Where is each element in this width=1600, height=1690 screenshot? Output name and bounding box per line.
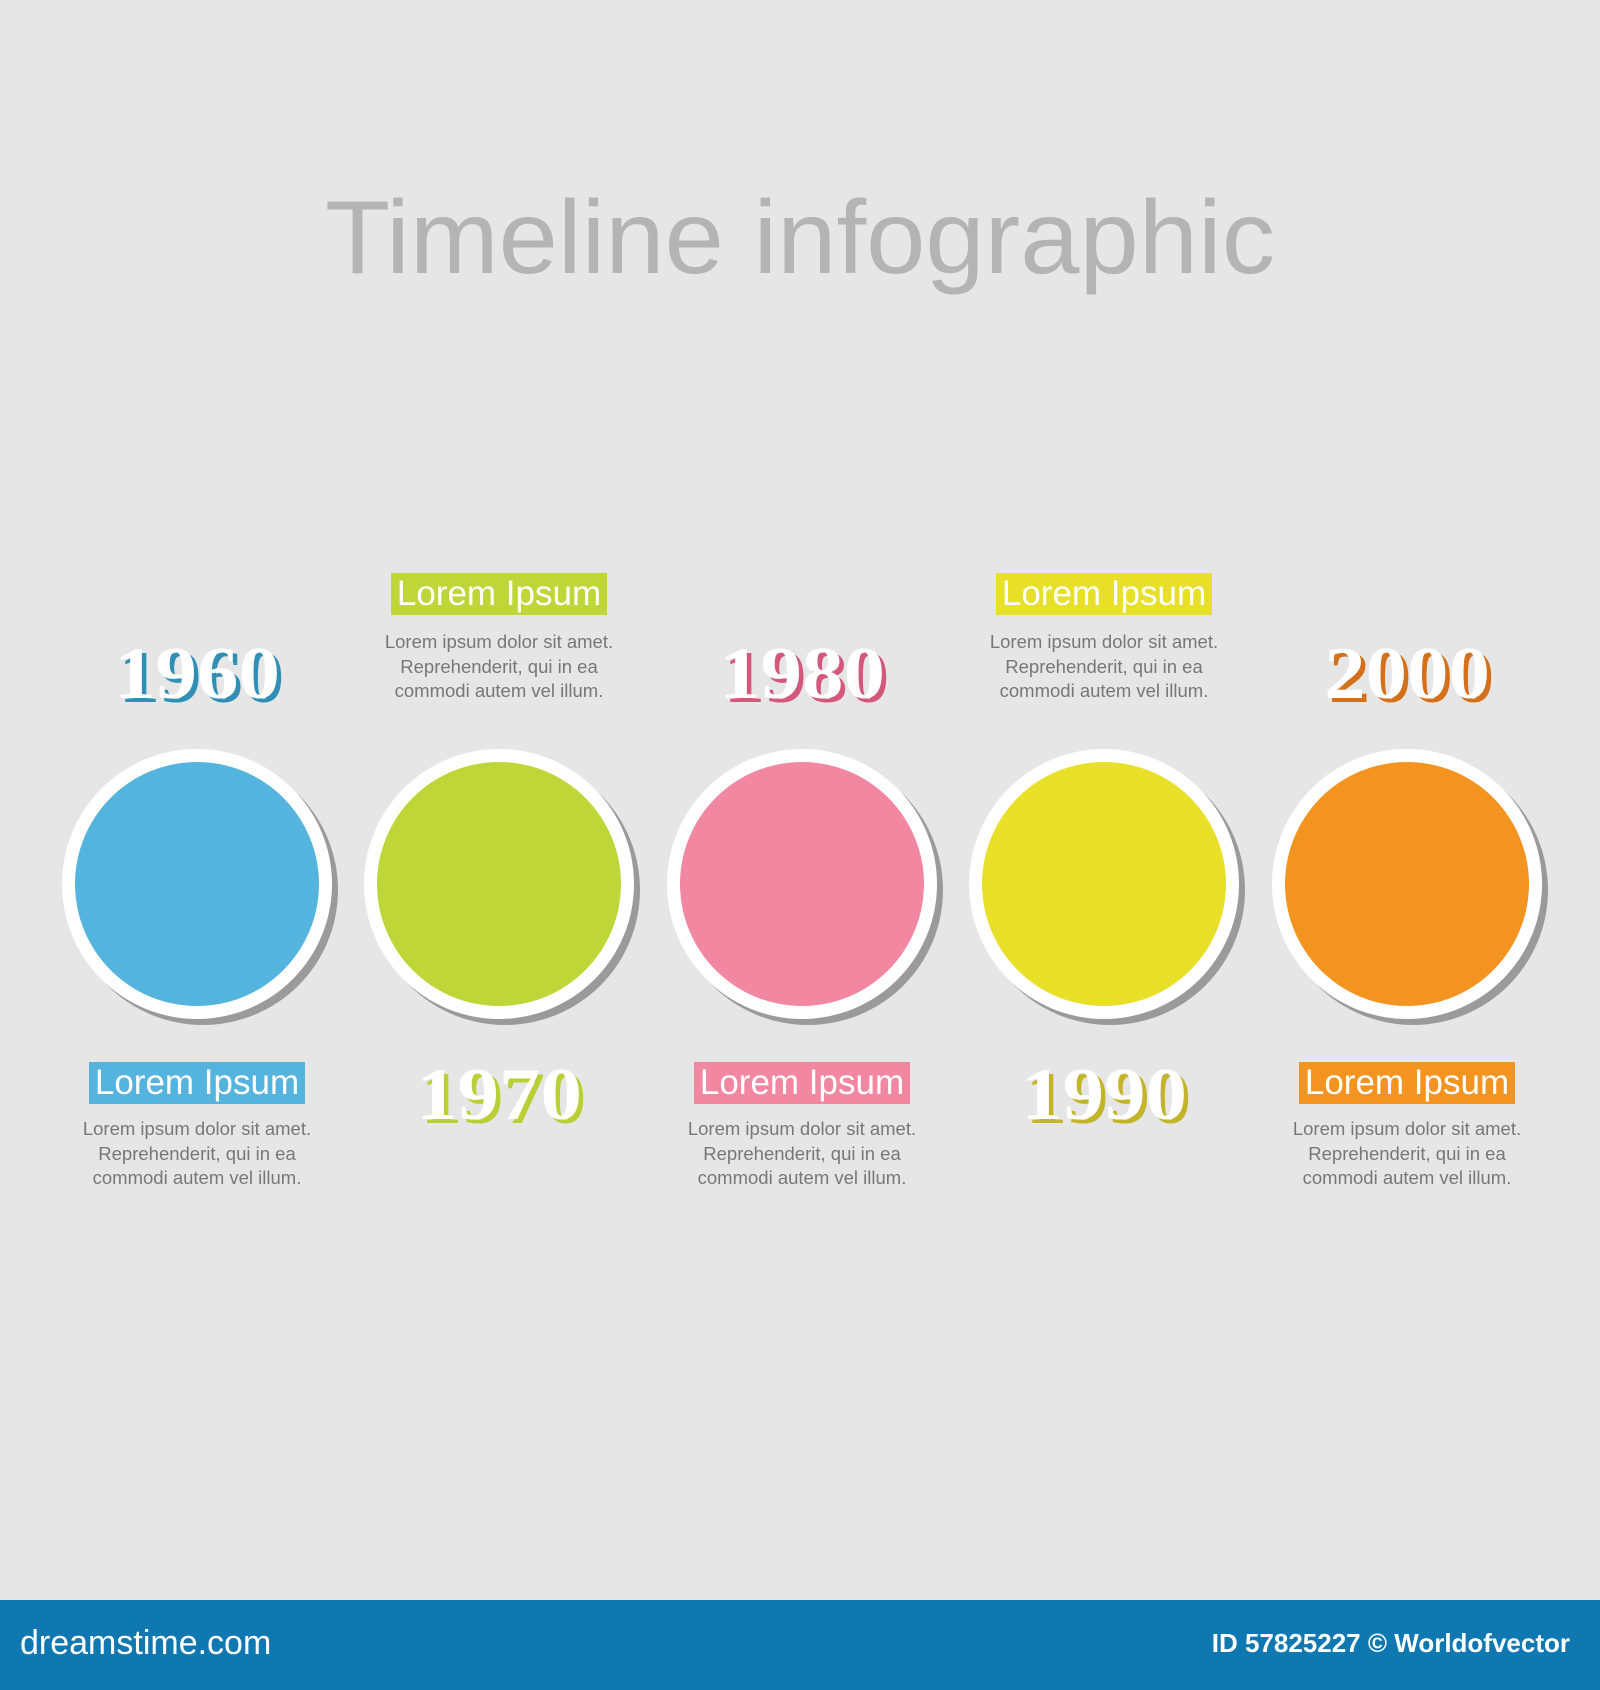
- body text: Reprehenderit, qui in ea: [703, 1142, 901, 1164]
- body text: [83, 1118, 311, 1188]
- circle yellow: [969, 749, 1239, 1019]
- label: Lorem Ipsum: [700, 1063, 904, 1102]
- panel: 2000: [1272, 633, 1548, 1188]
- body text: commodi autem vel illum.: [1000, 680, 1208, 701]
- body text: Lorem ipsum dolor sit amet.: [990, 631, 1218, 652]
- body text: commodi autem vel illum.: [1303, 1167, 1511, 1188]
- body text: Reprehenderit, qui in ea: [1308, 1142, 1506, 1164]
- label: Lorem Ipsum: [397, 574, 601, 613]
- body text: commodi autem vel illum.: [698, 1167, 906, 1188]
- label: Lorem Ipsum: [1305, 1063, 1509, 1102]
- year 1970: 1970: [416, 1054, 582, 1136]
- panel: 1990: [969, 573, 1245, 1136]
- footer id: ID 57825227 © Worldofvector: [1212, 1628, 1570, 1658]
- panel: 1970: [364, 573, 640, 1136]
- body text: commodi autem vel illum.: [395, 680, 603, 701]
- panel: 1960: [62, 633, 338, 1188]
- year 1980: 1980: [719, 633, 885, 715]
- body text: [688, 1118, 916, 1188]
- circle blue: [62, 749, 332, 1019]
- year 1990: 1990: [1021, 1054, 1187, 1136]
- body text: [1293, 1118, 1521, 1188]
- body text: Reprehenderit, qui in ea: [400, 656, 598, 676]
- circle green: [364, 749, 634, 1019]
- body text: Lorem ipsum dolor sit amet.: [385, 631, 613, 652]
- label: Lorem Ipsum: [95, 1063, 299, 1102]
- circle pink: [667, 749, 937, 1019]
- body text: [385, 631, 613, 701]
- body text: Reprehenderit, qui in ea: [1005, 656, 1203, 676]
- body text: commodi autem vel illum.: [93, 1167, 301, 1188]
- footer bar: [0, 1600, 1600, 1690]
- circle orange: [1272, 749, 1542, 1019]
- title: Timeline infographic: [325, 180, 1275, 296]
- body text: Lorem ipsum dolor sit amet.: [83, 1118, 311, 1139]
- body text: Lorem ipsum dolor sit amet.: [1293, 1118, 1521, 1139]
- label: Lorem Ipsum: [1002, 574, 1206, 613]
- body text: Reprehenderit, qui in ea: [98, 1142, 296, 1164]
- footer brand: dreamstime.com: [20, 1624, 271, 1662]
- year 2000: 2000: [1324, 633, 1490, 715]
- panel: 1980: [667, 633, 943, 1188]
- body text: [990, 631, 1218, 701]
- body text: Lorem ipsum dolor sit amet.: [688, 1118, 916, 1139]
- year 1960: 1960: [114, 633, 280, 715]
